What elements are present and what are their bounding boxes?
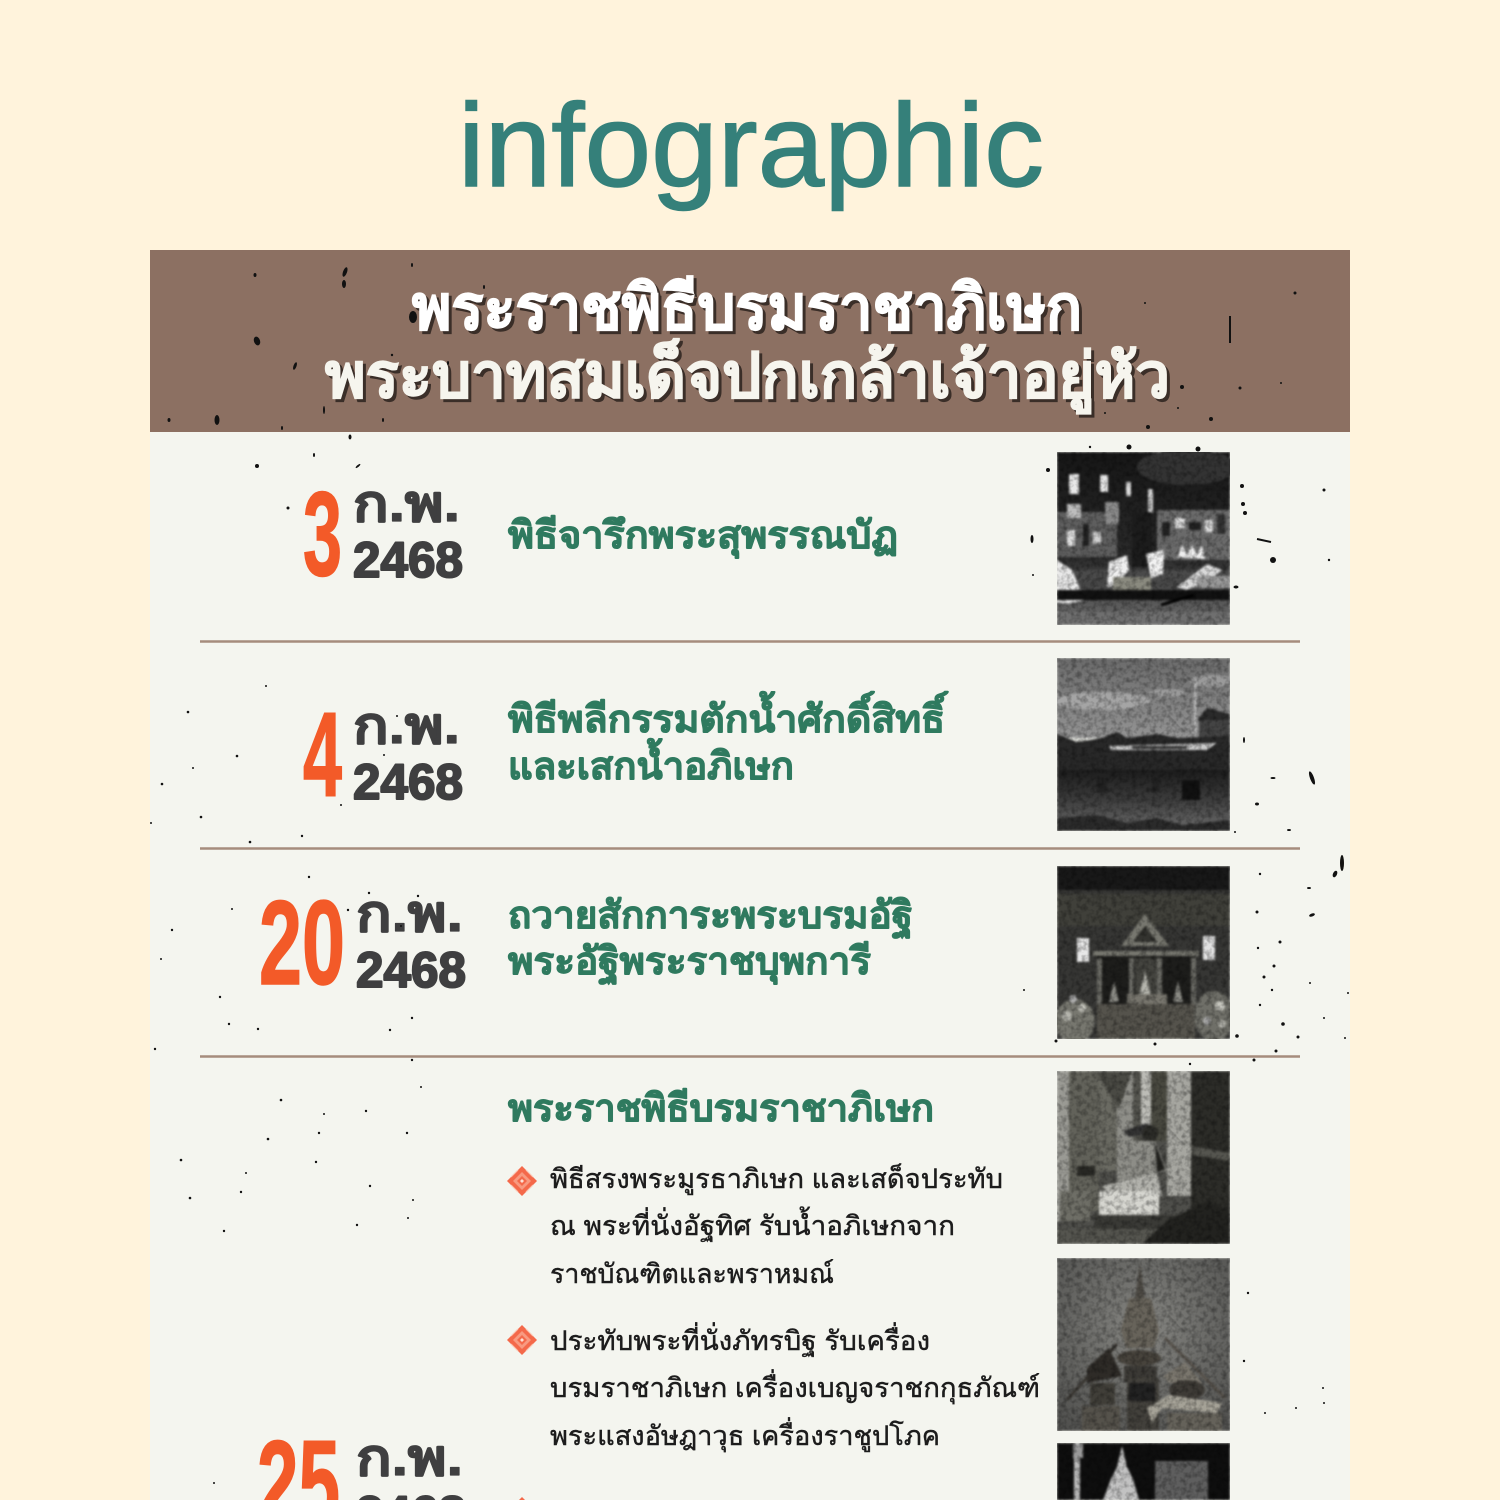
date: ก.พ. (356, 1430, 463, 1486)
icon: thai diamond (507, 1325, 537, 1355)
event heading: พระราชพิธีบรมราชาภิเษก (508, 1088, 934, 1130)
date (259, 876, 466, 1010)
bullet text: พิธีสรงพระมูรธาภิเษก และเสด็จประทับ (550, 1161, 1003, 1195)
row: 4 Feb 2468 (303, 658, 1234, 831)
ink speck texture (150, 263, 1349, 1484)
event text (508, 691, 949, 788)
event text: ถวายสักการะพระบรมอัฐิ (508, 895, 913, 940)
bullet text (550, 1161, 1003, 1289)
heading: ceremony title line 1: พระราชพิธีบรมราชาภิเษก (415, 277, 1085, 346)
panel: timeline (150, 250, 1350, 1500)
bullet text: ประทับพระที่นั่งภัทรบิฐ รับเครื่อง (550, 1322, 930, 1357)
title: infographic (458, 80, 1044, 212)
event text: พระอัฐิพระราชบุพการี (508, 941, 872, 986)
photo: royal crown on dark background (1057, 1443, 1230, 1500)
date: ก.พ. (356, 886, 463, 942)
photo: river landscape (1054, 658, 1234, 831)
heading: ceremony title line 2: พระบาทสมเด็จปกเกล้าเจ้าอยู่หัว (325, 338, 1170, 414)
photo: royal crown regalia (1057, 1258, 1230, 1431)
date: ก.พ. (353, 698, 460, 754)
date: 4 (303, 688, 342, 822)
row: 20 Feb 2468 (259, 866, 1234, 1043)
row: 25 Feb 2468 (257, 1071, 1230, 1500)
date: 20 (259, 876, 345, 1010)
heading: ceremony title line 1: พระราชพิธีบรมราชาภิเษก (412, 274, 1082, 343)
event text (508, 895, 913, 986)
bullet text (550, 1322, 1040, 1453)
bullet: regalia (507, 1322, 1040, 1453)
date: 2468 (353, 754, 463, 810)
bullet text: ราชบัณฑิตและพราหมณ์ (550, 1258, 834, 1289)
date: 2468 (356, 942, 466, 998)
date: ก.พ. (353, 476, 460, 532)
date (303, 467, 463, 601)
date: 3 (303, 467, 342, 601)
heading: ceremony title line 2: พระบาทสมเด็จปกเกล้าเจ้าอยู่หัว (328, 341, 1173, 417)
date (257, 1416, 466, 1500)
date: 2468 (353, 532, 463, 588)
icon: thai diamond (third bullet) (507, 1497, 537, 1500)
row: 3 Feb 2468 (303, 449, 1237, 625)
panel: header band (150, 250, 1350, 432)
photo: inscribing ceremony (1057, 449, 1237, 625)
date (303, 688, 463, 822)
photo: shrine altar (1055, 866, 1234, 1043)
photo: king on throne (1057, 1071, 1230, 1244)
bullet text: พระแสงอัษฎาวุธ เครื่องราชูปโภค (550, 1417, 940, 1453)
event text: และเสกน้ำอภิเษก (508, 738, 794, 788)
event text: พิธีจารึกพระสุพรรณบัฏ (508, 515, 898, 559)
bullet text: ณ พระที่นั่งอัฐทิศ รับน้ำอภิเษกจาก (550, 1206, 955, 1242)
bullet: anointment (507, 1161, 1003, 1289)
icon: thai diamond (507, 1166, 537, 1196)
event text: พิธีพลีกรรมตักน้ำศักดิ์สิทธิ์ (508, 691, 949, 741)
bullet text: บรมราชาภิเษก เครื่องเบญจราชกกุธภัณฑ์ (550, 1369, 1040, 1405)
